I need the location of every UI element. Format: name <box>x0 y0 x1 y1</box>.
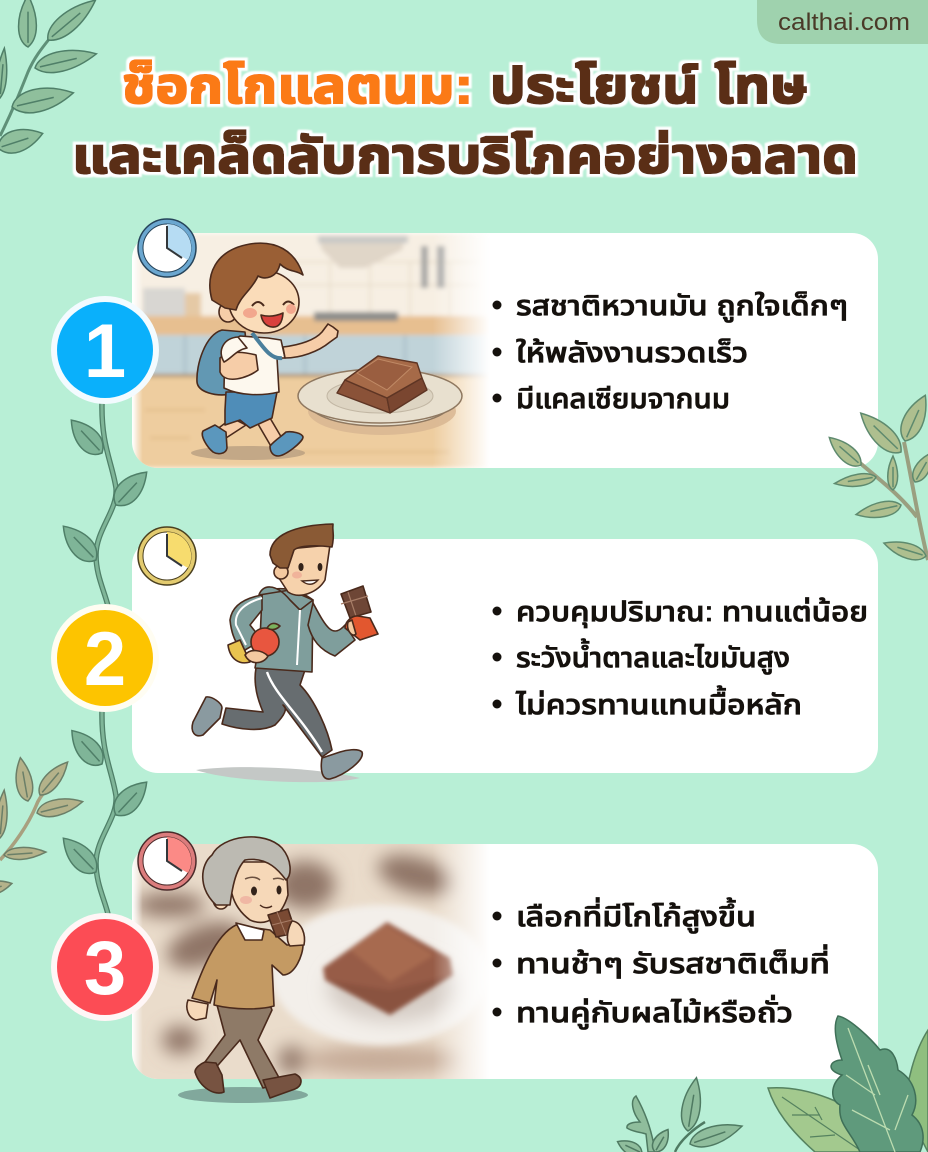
card 2 background <box>132 539 878 773</box>
bullet list 2: ระวังน้ำตาลและไขมันสูง <box>516 638 790 675</box>
clock 3 <box>138 832 196 890</box>
decoration: right branch <box>824 391 928 564</box>
character: child <box>191 243 338 460</box>
bullet list 1: มีแคลเซียมจากนม <box>516 383 730 414</box>
step badge 1: 1 <box>84 309 126 394</box>
step badge 2 <box>51 604 159 712</box>
bullet list 1: รสชาติหวานมัน ถูกใจเด็กๆ <box>516 290 848 323</box>
panel: step 1 <box>51 219 878 468</box>
clock 2 <box>138 527 196 585</box>
website badge <box>757 0 928 44</box>
title: ช็อกโกแลตนม: <box>122 58 473 114</box>
decoration: bottom-right foliage <box>768 1016 928 1152</box>
bullet list 3: ทานช้าๆ รับรสชาติเต็มที่ <box>516 944 830 979</box>
chocolate piece <box>337 356 427 413</box>
card 3 background <box>132 844 878 1079</box>
card 1 background <box>132 233 878 468</box>
character: elder <box>178 837 308 1103</box>
bullet list 2: ไม่ควรทานแทนมื้อหลัก <box>515 685 802 720</box>
step badge 1 <box>51 296 159 404</box>
title <box>72 58 858 184</box>
step badge 3: 3 <box>84 926 126 1011</box>
bullet list 2 <box>492 596 868 720</box>
title: และเคล็ดลับการบริโภคอย่างฉลาด <box>72 128 858 184</box>
bullet list 3: ทานคู่กับผลไม้หรือถั่ว <box>516 994 793 1030</box>
step badge 2: 2 <box>84 617 126 702</box>
character: adult running <box>192 524 378 782</box>
bullet list 3 <box>492 897 830 1030</box>
panel: step 3 <box>51 832 878 1103</box>
kitchen scene <box>132 233 492 468</box>
blurred chocolate scene <box>132 844 492 1079</box>
bullet list 3: เลือกที่มีโกโก้สูงขึ้น <box>516 897 756 934</box>
plate <box>298 369 462 435</box>
title: ประโยชน์ โทษ <box>490 58 808 114</box>
decoration: bottom sprig <box>615 1076 745 1152</box>
step badge 3 <box>51 913 159 1021</box>
bullet list 2: ควบคุมปริมาณ: ทานแต่น้อย <box>516 596 868 628</box>
decoration: lower-left branch <box>0 756 84 898</box>
website badge: calthai.com <box>778 9 910 36</box>
bullet list 1: ให้พลังงานรวดเร็ว <box>516 337 748 368</box>
panel: step 2 <box>51 524 878 782</box>
decoration: connecting vine <box>55 402 154 914</box>
decoration: top-left branch <box>0 0 101 158</box>
clock 1 <box>138 219 196 277</box>
bullet list 1 <box>492 290 848 414</box>
